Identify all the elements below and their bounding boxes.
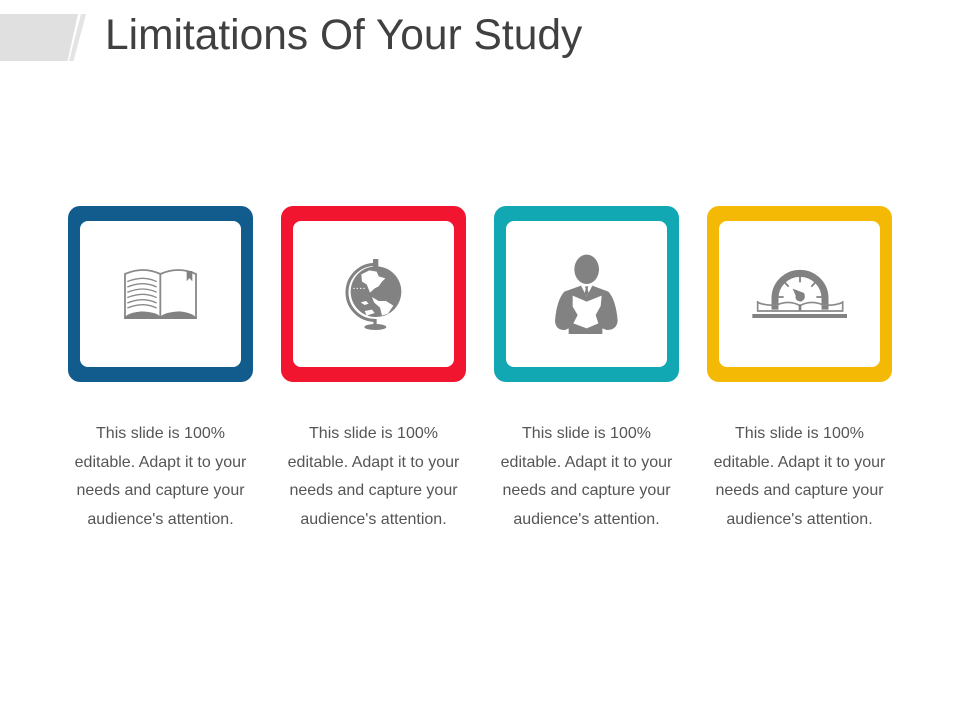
text: red card caption: This slide is 100% [309,425,438,442]
icon: person reading [555,254,618,334]
text: blue card caption: audience's attention. [87,511,234,528]
text: yellow card caption: needs and capture your [715,482,884,499]
text: red card caption [288,425,460,528]
title: Limitations Of Your Study [105,12,582,59]
icon: globe [346,259,402,330]
text: red card caption: editable. Adapt it to your [288,454,459,471]
icon: gauge on book [752,270,847,318]
text: blue card caption: This slide is 100% [96,425,225,442]
text: blue card caption: needs and capture your [76,482,245,499]
text: teal card caption: editable. Adapt it to your [501,454,672,471]
text: blue card caption [75,425,246,528]
text: yellow card caption: editable. Adapt it to your [714,454,885,471]
text: teal card caption: audience's attention. [513,511,660,528]
text: teal card caption [501,425,672,528]
panel: yellow card [707,206,892,382]
panel: teal card [494,206,679,382]
panel: blue card [68,206,253,382]
text: yellow card caption: audience's attention. [726,511,873,528]
text: red card caption: needs and capture your [289,482,458,499]
title banner shape [0,14,86,61]
icon: open book [124,269,197,319]
text: yellow card caption: This slide is 100% [735,425,864,442]
text: teal card caption: This slide is 100% [522,425,651,442]
text: teal card caption: needs and capture your [502,482,671,499]
panel: red card [281,206,466,382]
text: yellow card caption [714,425,886,528]
text: blue card caption: editable. Adapt it to your [75,454,246,471]
text: red card caption: audience's attention. [300,511,447,528]
